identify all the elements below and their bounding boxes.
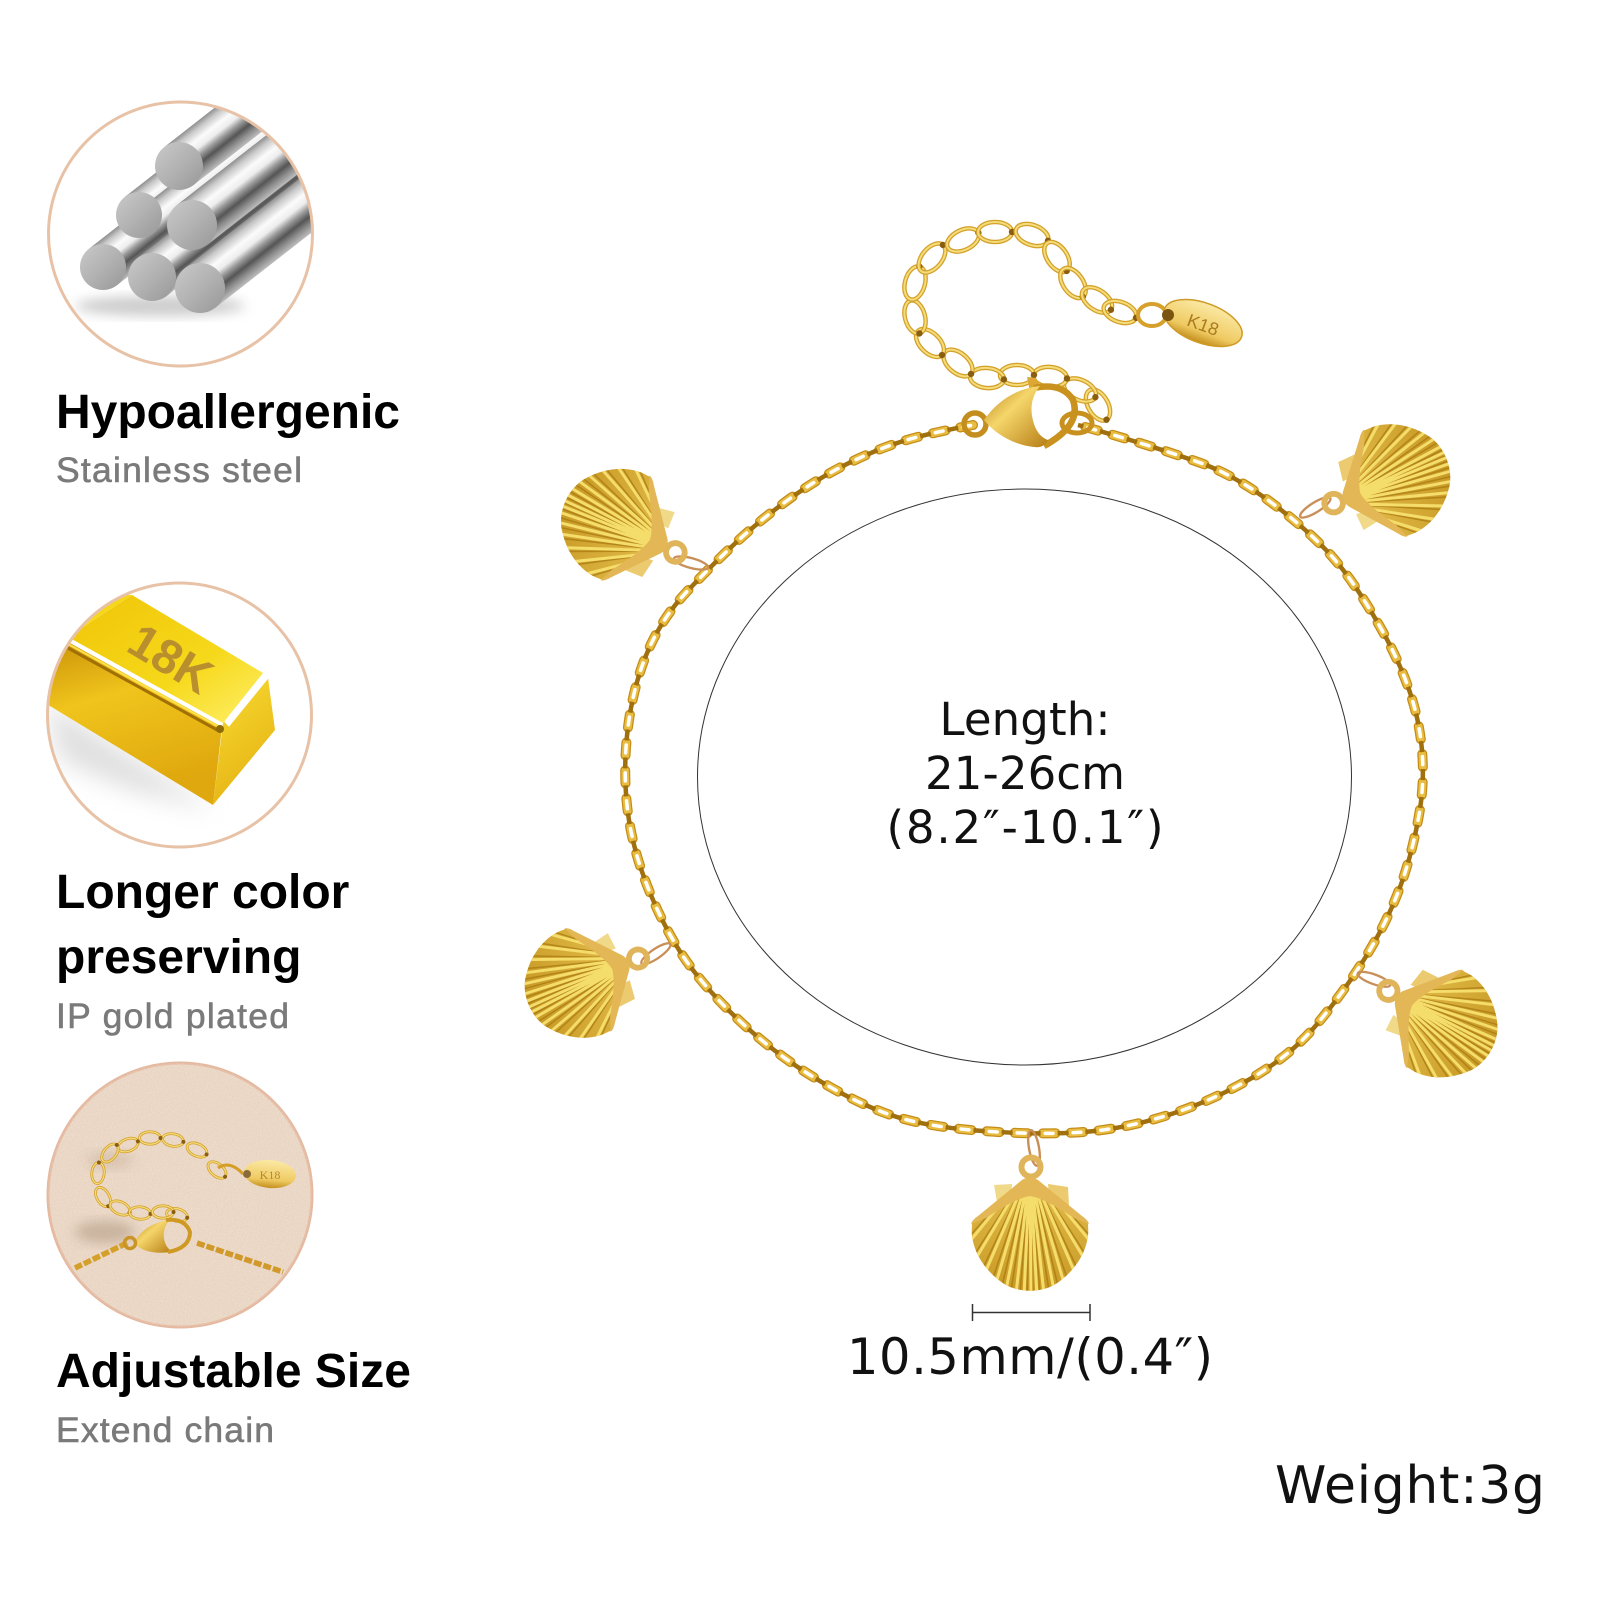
text: length measurement: 21-26cm	[925, 747, 1125, 800]
heading: Hypoallergenic: Hypoallergenic	[56, 386, 400, 439]
panel: color preserving feature	[20, 583, 349, 1036]
shell charm: upper right	[1276, 399, 1475, 576]
text: length measurement	[886, 693, 1164, 854]
text: length measurement: (8.2″-10.1″)	[886, 801, 1164, 854]
shell charm: upper left	[535, 441, 736, 624]
heading: Adjustable Size: Adjustable Size	[56, 1345, 411, 1398]
extender chain	[901, 220, 1142, 427]
icon: steel rods in circle	[47, 100, 314, 368]
shell charm: lower right	[1326, 920, 1526, 1107]
tag: K18 oval: K18	[1185, 310, 1221, 340]
text: length measurement: Length:	[940, 693, 1110, 746]
icon: extender chain on sand background in circle	[48, 1063, 312, 1327]
text: weight: Weight:3g	[1275, 1456, 1545, 1516]
tag: K18 oval	[1138, 290, 1248, 356]
anklet: link chain	[625, 425, 1423, 1133]
heading: Longer color preserving: Longer color	[56, 866, 349, 919]
text: IP gold plated: IP gold plated	[56, 996, 289, 1036]
panel: adjustable size feature	[48, 1063, 411, 1450]
dimension line: shell width	[972, 1304, 1090, 1321]
text: shell width: 10.5mm/(0.4″)	[847, 1328, 1213, 1386]
icon: 18K gold bar in circle	[20, 583, 312, 847]
heading: Longer color preserving: preserving	[56, 931, 301, 984]
lobster clasp	[964, 377, 1092, 447]
text: Extend chain: Extend chain	[56, 1410, 274, 1450]
shell charm: bottom	[966, 1129, 1094, 1296]
label: 18K stamp: 18K	[119, 614, 222, 705]
thin circle: inner diameter outline	[698, 489, 1352, 1065]
icon: extender chain on sand background in circle: K18	[260, 1168, 280, 1182]
shell charm: lower left	[500, 887, 696, 1064]
text: Stainless steel: Stainless steel	[56, 450, 302, 490]
panel: hypoallergenic feature	[47, 100, 398, 482]
